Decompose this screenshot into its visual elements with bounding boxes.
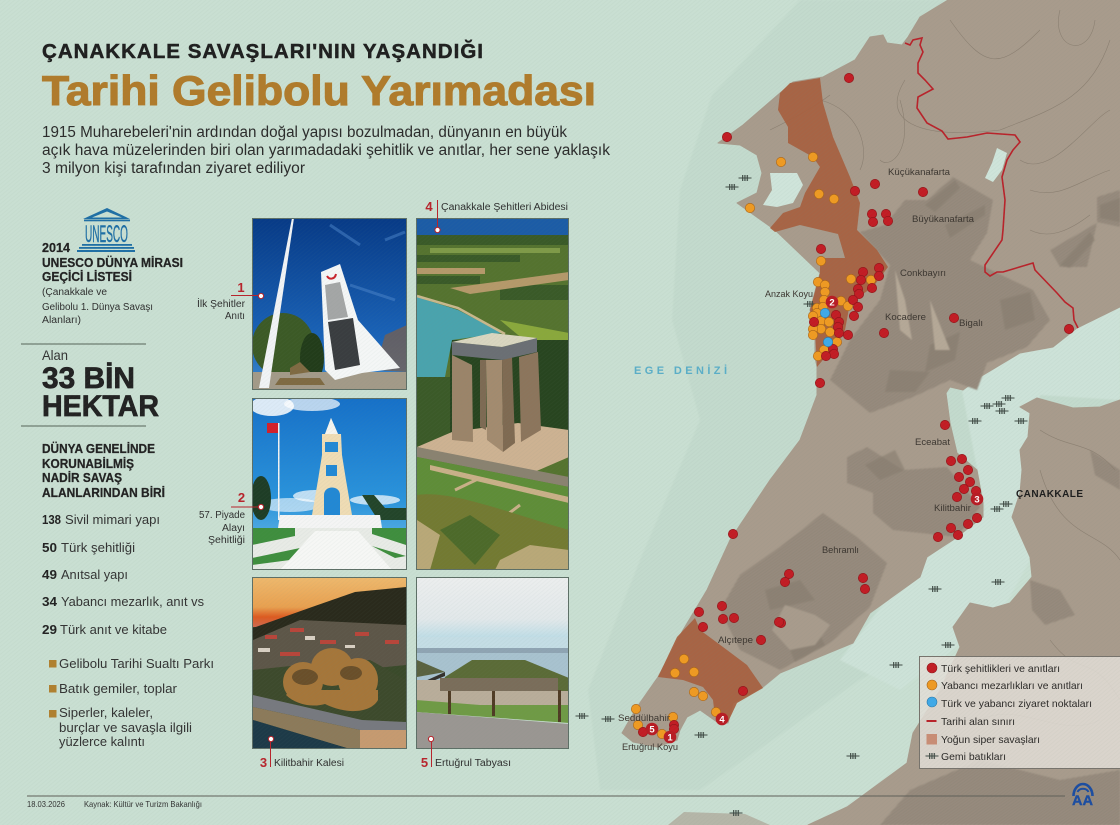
statistics list: 34	[42, 594, 58, 609]
statistics list: 50	[42, 540, 57, 555]
place names: Seddülbahir	[618, 713, 670, 724]
photo label 2: Alayı	[222, 523, 245, 534]
place names	[618, 167, 1083, 753]
icon: AA logo: AA	[1072, 792, 1093, 808]
bullet list	[49, 656, 214, 749]
place names: Behramlı	[822, 545, 859, 556]
footer: 18.03.2026	[27, 799, 65, 809]
numbered map markers: 4	[719, 714, 725, 726]
red points: Turkish memorials	[638, 73, 1074, 737]
rare battlefield heading: NADİR SAVAŞ	[42, 470, 122, 485]
place names: Kilitbahir	[934, 503, 971, 514]
place names: Eceabat	[915, 437, 950, 448]
legend: Yabancı mezarlıkları ve anıtları	[941, 680, 1083, 692]
light patches in hills	[772, 605, 830, 650]
photo label 4	[425, 199, 568, 233]
rare battlefield heading: KORUNABİLMİŞ	[42, 456, 134, 471]
statistics list: Türk şehitliği	[61, 540, 135, 555]
place names: Anzak Koyu	[765, 289, 813, 300]
photo label 1: 1	[237, 280, 245, 295]
bullet list: Batık gemiler, toplar	[59, 681, 178, 696]
area stat: 33 BİN	[42, 362, 135, 395]
historic area boundary	[905, 38, 1078, 328]
contour lines	[770, 10, 1120, 726]
statistics list: 29	[42, 622, 57, 637]
photo label 2: 57. Piyade	[199, 510, 245, 521]
text: UNESCO	[85, 221, 128, 248]
UNESCO text block	[42, 241, 183, 326]
bullet list: burçlar ve savaşla ilgili	[59, 720, 192, 735]
photo label 1: Anıtı	[225, 311, 245, 322]
hill areas	[720, 177, 1120, 825]
statistics list: Anıtsal yapı	[61, 567, 128, 582]
bullet list: yüzlerce kalıntı	[59, 734, 145, 749]
ship wrecks	[576, 175, 1028, 816]
statistics list: 49	[42, 567, 57, 582]
place names: Bigalı	[959, 318, 983, 329]
shallow water bands	[588, 0, 1120, 790]
lakes	[763, 148, 1007, 207]
footer	[27, 796, 1065, 809]
orange points: foreign cemeteries	[631, 152, 876, 739]
area stat	[21, 344, 159, 426]
UNESCO text block: 2014	[42, 241, 70, 255]
photo label 5: Ertuğrul Tabyası	[435, 758, 511, 769]
numbered map markers: 2	[829, 298, 835, 308]
intro paragraph: açık hava müzelerinden biri olan yarımadadaki şehitlik ve anıtlar, her sene yaklaşık	[42, 142, 610, 159]
statistics list: Sivil mimari yapı	[65, 512, 160, 527]
legend: Tarihi alan sınırı	[941, 716, 1015, 728]
place names: Kocadere	[885, 312, 926, 323]
photo 3: Kilitbahir Kalesi	[252, 577, 407, 749]
statistics list: 138	[42, 512, 61, 527]
UNESCO text block: (Çanakkale ve	[42, 287, 107, 298]
photo 1: İlk Şehitler Anıtı	[252, 218, 407, 390]
place names: Conkbayırı	[900, 268, 946, 279]
footer: Kaynak: Kültür ve Turizm Bakanlığı	[84, 799, 202, 809]
UNESCO text block: UNESCO DÜNYA MİRASI	[42, 255, 183, 270]
place names: ÇANAKKALE	[1016, 489, 1083, 500]
place names: Küçükanafarta	[888, 167, 951, 178]
numbered map markers: 1	[667, 732, 673, 744]
area stat: HEKTAR	[42, 390, 159, 423]
photo 4: Çanakkale Şehitleri Abidesi	[416, 218, 569, 570]
dark ridges	[765, 180, 1120, 662]
bullet list: Gelibolu Tarihi Sualtı Parkı	[59, 656, 214, 671]
blue points: visit points	[820, 308, 833, 347]
UNESCO text block: GEÇİCİ LİSTESİ	[42, 269, 132, 284]
numbered map markers: 3	[974, 494, 980, 506]
title small: ÇANAKKALE SAVAŞLARI'NIN YAŞANDIĞI	[42, 39, 483, 63]
legend: Türk şehitlikleri ve anıtları	[941, 663, 1060, 675]
place names: Alçıtepe	[718, 635, 753, 646]
land: bottom strip	[668, 812, 770, 825]
rare battlefield heading	[42, 441, 165, 500]
intro paragraph	[42, 124, 610, 177]
land: peninsula	[622, 0, 1120, 747]
photo label 4: 4	[425, 199, 433, 214]
UNESCO text block: Alanları)	[42, 315, 81, 326]
statistics list: Yabancı mezarlık, anıt vs	[61, 594, 204, 609]
statistics list: Türk anıt ve kitabe	[60, 622, 167, 637]
legend: Yoğun siper savaşları	[941, 734, 1040, 746]
statistics list	[42, 512, 204, 637]
icon: AA logo	[1072, 784, 1093, 808]
legend	[920, 656, 1120, 768]
photo label 2: 2	[238, 490, 245, 505]
land: Anatolian side	[808, 398, 1120, 825]
photo 2: 57. Piyade Alayı Şehitliği	[250, 396, 407, 570]
photo label 3	[260, 736, 344, 770]
intense trench warfare zones	[658, 78, 888, 722]
photo label 2: Şehitliği	[208, 535, 245, 546]
photo label 3: 3	[260, 755, 267, 770]
legend: Gemi batıkları	[941, 751, 1006, 763]
photo label 5	[421, 736, 511, 770]
photo label 2	[199, 490, 264, 546]
UNESCO text block: Gelibolu 1. Dünya Savaşı	[42, 302, 153, 313]
title main: Tarihi Gelibolu Yarımadası	[42, 67, 596, 114]
rare battlefield heading: DÜNYA GENELİNDE	[42, 441, 155, 456]
area stat: Alan	[42, 347, 68, 363]
photo label 1: İlk Şehitler	[197, 297, 246, 310]
photo label 3: Kilitbahir Kalesi	[274, 758, 344, 769]
photo label 4: Çanakkale Şehitleri Abidesi	[441, 202, 568, 213]
bullet list: Siperler, kaleler,	[59, 705, 153, 720]
legend: Türk ve yabancı ziyaret noktaları	[941, 698, 1092, 710]
photo label 5: 5	[421, 755, 428, 770]
rare battlefield heading: ALANLARINDAN BİRİ	[42, 485, 165, 500]
place names: Büyükanafarta	[912, 214, 975, 225]
icon: UNESCO logo	[77, 208, 135, 252]
photo label 1	[197, 280, 264, 322]
photo 5: Ertuğrul Tabyası	[416, 577, 569, 749]
place names: Ertuğrul Koyu	[622, 742, 678, 753]
numbered map markers: 5	[649, 724, 655, 736]
intro paragraph: 1915 Muharebeleri'nin ardından doğal yapısı bozulmadan, dünyanın en büyük	[42, 124, 567, 141]
place names: EGE DENİZİ	[634, 364, 727, 377]
numbered map markers	[646, 296, 983, 744]
intro paragraph: 3 milyon kişi tarafından ziyaret ediliyor	[42, 160, 305, 177]
map: Gelibolu peninsula	[576, 0, 1120, 825]
